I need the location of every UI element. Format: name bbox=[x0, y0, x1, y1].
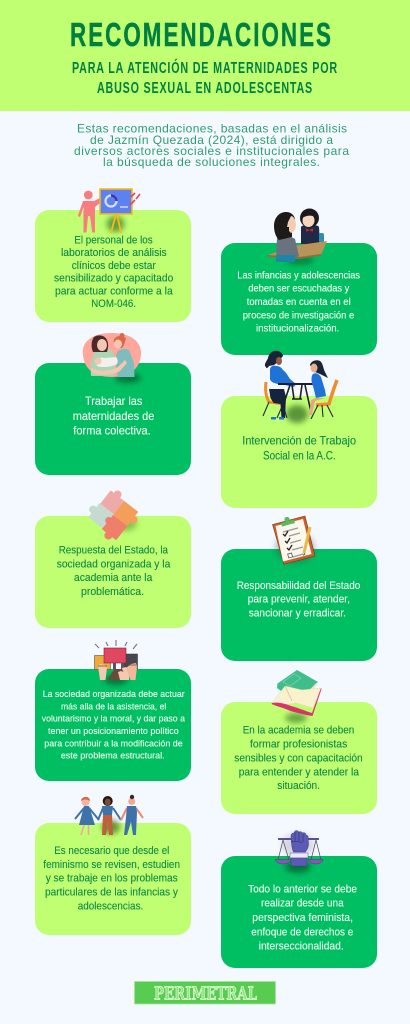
icon: protest signs and fists bbox=[94, 640, 138, 685]
text block: Social en la A.C. bbox=[263, 449, 336, 462]
text block: problemática. bbox=[81, 586, 144, 598]
text block: particulares de las infancias y bbox=[45, 887, 178, 899]
subtitle: ABUSO SEXUAL EN ADOLESCENTAS bbox=[97, 80, 313, 97]
text block: Responsabilidad del Estado bbox=[237, 580, 360, 592]
icon: two women with a baby bbox=[83, 333, 141, 383]
text block: institucionalización. bbox=[256, 324, 339, 335]
text block: para actuar conforme a la bbox=[55, 285, 173, 297]
intro text: diversos actores sociales e institucionales para bbox=[74, 144, 349, 158]
text block bbox=[234, 725, 363, 792]
text block: Intervención de Trabajo bbox=[242, 434, 356, 447]
text block: proceso de investigación e bbox=[243, 310, 355, 321]
text block: sensibles y con capacitación bbox=[234, 752, 363, 764]
panel: sociedad organizada bbox=[35, 669, 191, 781]
text block bbox=[42, 689, 186, 762]
text block: feminismo se revisen, estudien bbox=[43, 859, 180, 871]
panel: infancias escuchadas bbox=[221, 243, 377, 355]
text block: para entender y atender la bbox=[239, 766, 360, 778]
text block: laboratorios de análisis bbox=[61, 247, 167, 259]
panel: maternidades colectiva bbox=[35, 363, 191, 475]
logo: Perimetral: PERIMETRAL bbox=[154, 984, 257, 1004]
panel: personal de laboratorios bbox=[35, 210, 191, 322]
intro text: de Jazmín Quezada (2024), está dirigido a bbox=[90, 133, 333, 147]
intro text: Estas recomendaciones, basadas en el análisis bbox=[77, 122, 347, 136]
text block: academia ante la bbox=[74, 572, 153, 584]
text block: En la academia se deben bbox=[243, 725, 354, 737]
text block: Trabajar las bbox=[85, 394, 142, 408]
header band bbox=[0, 0, 410, 111]
text block: sociedad organizada y la bbox=[57, 558, 171, 570]
text block: sensibilizado y capacitado bbox=[54, 273, 173, 285]
icon: fist over scales of justice bbox=[276, 831, 323, 873]
panel: responsabilidad del estado bbox=[221, 549, 377, 661]
subtitle bbox=[72, 58, 338, 97]
icon: stacked books bbox=[272, 670, 322, 723]
text block: formar profesionistas bbox=[250, 739, 348, 751]
panel: trabajo social bbox=[221, 396, 377, 508]
text block bbox=[43, 845, 180, 912]
text block: forma colectiva. bbox=[73, 424, 151, 438]
text block: tener un posicionamiento político bbox=[48, 726, 179, 737]
text block bbox=[237, 580, 360, 619]
text block: situación. bbox=[277, 780, 320, 792]
text block: clínicos debe estar bbox=[72, 260, 156, 272]
text block: realizar desde una bbox=[261, 898, 344, 910]
text block: NOM-046. bbox=[91, 298, 136, 310]
text block: y se trabaje en los problemas bbox=[46, 873, 178, 885]
text block bbox=[54, 234, 173, 310]
icon: two people at a table bbox=[263, 351, 337, 423]
icon: two people talking at a desk bbox=[268, 208, 327, 265]
icon: clipboard checklist bbox=[272, 516, 315, 564]
text block: adolescencias. bbox=[78, 900, 143, 912]
text block bbox=[242, 434, 356, 462]
text block: deben ser escuchadas y bbox=[248, 284, 350, 295]
text block bbox=[73, 394, 155, 438]
text block: sancionar y erradicar. bbox=[249, 607, 346, 619]
icon: presenter with board bbox=[78, 189, 140, 233]
intro text: la búsqueda de soluciones integrales. bbox=[103, 155, 320, 169]
text block bbox=[248, 883, 357, 953]
text block: este problema estructural. bbox=[61, 751, 165, 762]
icon: puzzle pieces bbox=[81, 483, 145, 547]
panel: respuesta del estado bbox=[35, 516, 191, 628]
text block bbox=[57, 544, 171, 598]
intro text bbox=[74, 122, 349, 169]
text block: Respuesta del Estado, la bbox=[59, 544, 169, 556]
text block: Todo lo anterior se debe bbox=[248, 883, 357, 895]
text block: tomadas en cuenta en el bbox=[247, 297, 351, 308]
text block: La sociedad organizada debe actuar bbox=[43, 689, 185, 700]
panel: feminismo bbox=[35, 823, 191, 935]
text block: perspectiva feminista, bbox=[252, 912, 353, 924]
text block: enfoque de derechos e bbox=[251, 926, 353, 938]
text block: para contribuir a la modificación de bbox=[44, 738, 183, 749]
text block: para prevenir, atender, bbox=[248, 594, 350, 606]
text block: más alla de la asistencia, el bbox=[61, 702, 166, 713]
text block: interseccionalidad. bbox=[259, 941, 344, 953]
text block: Las infancias y adolescencias bbox=[237, 271, 360, 282]
icon: three women holding hands bbox=[75, 795, 143, 835]
panel: perspectiva feminista bbox=[221, 856, 377, 968]
text block: Es necesario que desde el bbox=[54, 845, 169, 857]
text block: El personal de los bbox=[74, 234, 153, 246]
text block: voluntarismo y la moral, y dar paso a bbox=[42, 714, 186, 725]
text block: maternidades de bbox=[73, 409, 155, 423]
text block bbox=[237, 271, 360, 335]
panel: academia bbox=[221, 702, 377, 814]
